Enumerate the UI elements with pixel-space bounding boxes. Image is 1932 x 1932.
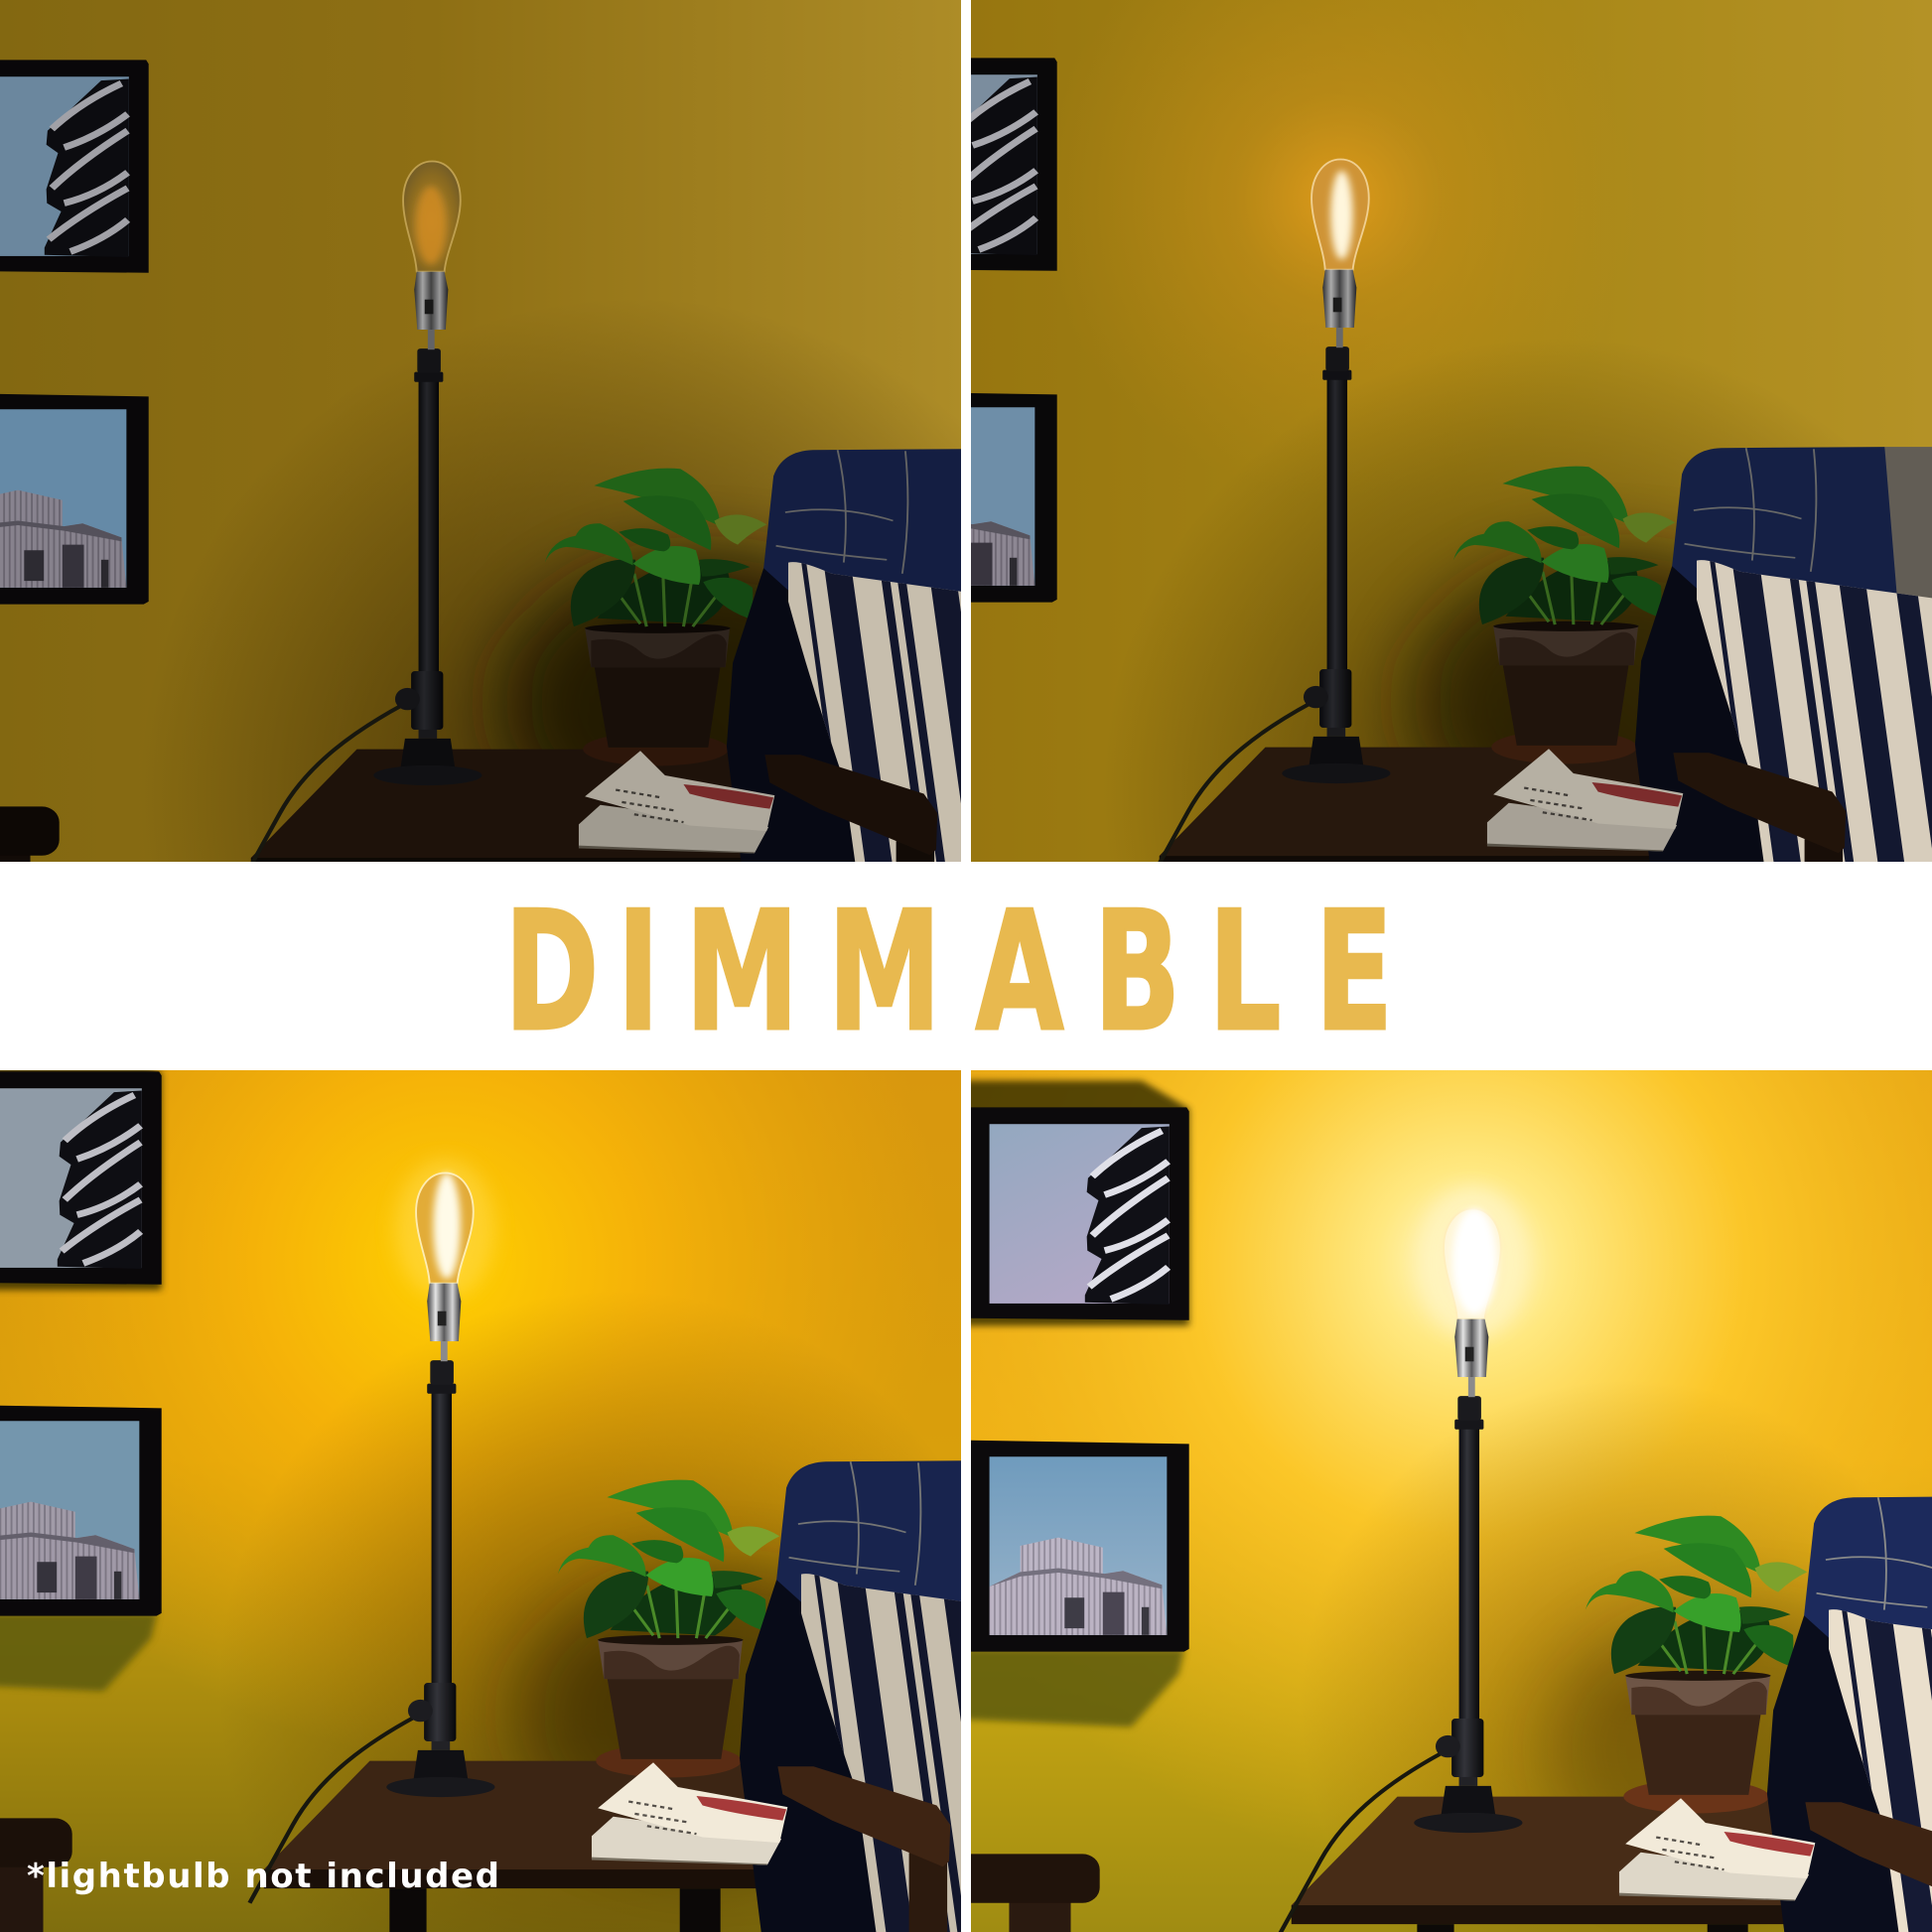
title: DIMMABLE: D: [504, 877, 599, 1068]
power cord: [250, 705, 401, 862]
book: [1487, 749, 1683, 852]
book: [592, 1762, 787, 1865]
panel: lamp full brightness: [929, 1070, 1932, 1932]
power cord: [1145, 703, 1311, 890]
panel: lamp low setting: [971, 0, 1932, 862]
side table: [264, 1761, 838, 1932]
power cord: [1277, 1752, 1444, 1932]
frame shadows: [947, 1080, 1189, 1726]
potted plant: pot: [1623, 1671, 1771, 1813]
shadow behind plant: [1545, 1604, 1932, 1894]
title: DIMMABLE: L: [1208, 877, 1281, 1068]
grey couch back: [1884, 447, 1932, 625]
chair arm left: [0, 1818, 72, 1932]
shadow behind plant: [465, 514, 768, 750]
side table: [250, 749, 741, 862]
striped pillow: [801, 1569, 1072, 1932]
striped pillow: [788, 562, 961, 862]
pipe lamp: [1414, 1319, 1522, 1833]
potted plant: pot: [1491, 621, 1639, 763]
framed picture: upper: [0, 1071, 162, 1285]
chair arm right: [777, 1766, 950, 1932]
pipe lamp: [386, 1284, 494, 1797]
wall: bright glow: [971, 1070, 1932, 1932]
frame shadows: [0, 1044, 162, 1691]
title: DIMMABLE: E: [1315, 877, 1393, 1068]
throw blanket: [740, 1460, 1005, 1932]
wall: dim mustard: [0, 0, 961, 862]
power cord: [249, 1717, 416, 1903]
framed picture: upper: [815, 58, 1057, 271]
scene: room objects: [929, 1080, 1932, 1932]
scene: room objects: [971, 58, 1932, 862]
potted plant: pot: [583, 623, 731, 765]
lightbulb: medium glow: [396, 1159, 494, 1299]
framed picture: lower: [947, 1440, 1189, 1652]
title: DIMMABLE: I: [618, 877, 659, 1068]
striped pillow: [1697, 555, 1932, 956]
side table: [1160, 748, 1733, 964]
wall: bright amber: [0, 1070, 961, 1932]
lightbulb: low glow: [1311, 160, 1369, 270]
book: [579, 751, 774, 854]
potted plant: leaves: [1453, 467, 1675, 624]
potted plant: leaves: [545, 469, 766, 626]
panel: lamp medium setting: [0, 1044, 1072, 1932]
wall: warm low glow: [971, 0, 1932, 862]
title: DIMMABLE: M: [828, 877, 941, 1068]
title band: [504, 877, 1393, 1068]
pipe lamp: [373, 272, 482, 785]
title: DIMMABLE: A: [976, 877, 1064, 1068]
chair arm right: [1805, 1802, 1932, 1932]
side table: [1292, 1797, 1865, 1932]
framed picture: upper: [0, 60, 149, 273]
striped pillow: [1829, 1604, 1932, 1932]
footnote: *lightbulb not included: [27, 1857, 499, 1896]
framed picture: upper: [947, 1107, 1189, 1320]
scene: room objects: [0, 1044, 1072, 1932]
chair arm left: [0, 806, 60, 862]
chair arm left: [929, 1854, 1100, 1932]
throw blanket: [1767, 1496, 1932, 1932]
potted plant: leaves: [558, 1480, 779, 1638]
framed picture: lower: [815, 390, 1057, 603]
throw blanket: [727, 449, 961, 862]
title: DIMMABLE: B: [1094, 877, 1180, 1068]
chair arm right: [764, 755, 937, 862]
framed picture: lower: [0, 392, 149, 605]
lightbulb: full brightness: [1417, 1186, 1528, 1337]
title: DIMMABLE: M: [685, 877, 799, 1068]
potted plant: pot: [596, 1635, 744, 1777]
lightbulb: barely lit: [403, 162, 461, 272]
potted plant: leaves: [1586, 1516, 1807, 1674]
shadow behind plant: [517, 1569, 924, 1859]
panel: lamp off, dimmest setting: [0, 0, 961, 862]
throw blanket: [1635, 447, 1900, 967]
title: DIMMABLE: [504, 877, 1393, 1068]
shadow behind plant: [1372, 514, 1677, 748]
pipe lamp: [1282, 270, 1390, 783]
chair arm right: [1673, 753, 1846, 973]
book: [1619, 1798, 1815, 1901]
framed picture: lower: [0, 1404, 162, 1616]
scene: room objects: [0, 60, 961, 862]
